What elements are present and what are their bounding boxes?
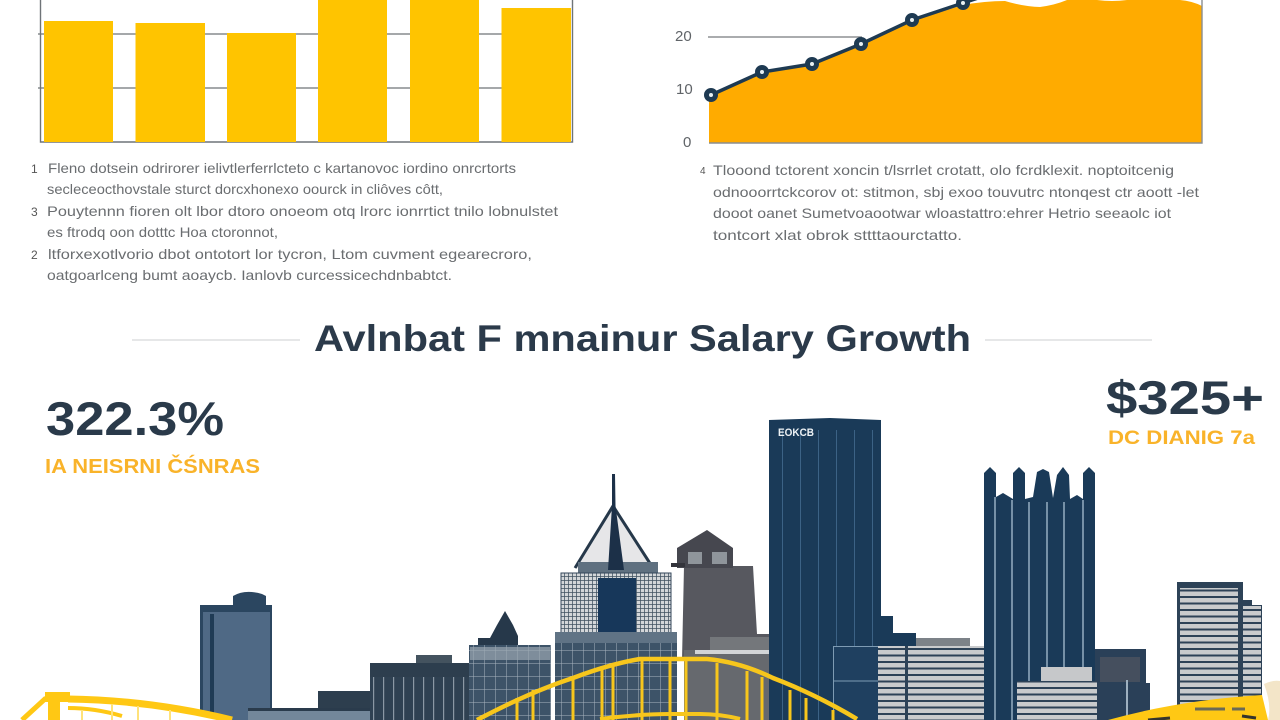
line series <box>706 0 990 100</box>
text block: left notes: 1 <box>31 162 38 176</box>
axis labels: 10 <box>676 81 693 98</box>
building: castle tower <box>984 467 1095 720</box>
text block: right notes: tontcort xlat obrok sttttaourctatto. <box>713 227 962 243</box>
building: dark right block <box>1095 649 1150 720</box>
building: dark mid block <box>370 655 487 720</box>
panel: bar chart <box>38 0 572 142</box>
building: cone top office <box>469 611 551 720</box>
axis labels: 0 <box>683 134 691 151</box>
building: navy tower <box>769 418 916 720</box>
text block: right notes <box>700 162 1199 243</box>
building: right striped tower <box>1177 582 1262 720</box>
text block: left notes <box>31 160 558 283</box>
text block: right notes: odnooorrtckcorov ot: stitmon, sbj exoo touvutrc ntonqest ctr aoott -let <box>713 184 1199 200</box>
text block: right notes: Tlooond tctorent xoncin t/lsrrlet crotatt, olo fcrdklexit. noptoitcenig <box>713 162 1174 178</box>
building: navy tower: EOKCB <box>778 427 814 439</box>
heading: Avlnbat F mnainur Salary Growth <box>314 318 971 359</box>
building: left blue tower <box>200 592 272 720</box>
text block: left notes: 3 <box>31 205 38 219</box>
building: central pyramid tower <box>555 474 677 720</box>
panel: area chart <box>675 0 1202 151</box>
text block: left notes: Fleno dotsein odrirorer ielivtlerferrlcteto c kartanovoc iordino onrcrtorts <box>48 160 516 176</box>
axis labels: 20 <box>675 28 692 45</box>
stat: right amount: DC DIANIG 7a <box>1108 428 1255 449</box>
building: striped block <box>878 638 987 720</box>
text block: left notes: Pouytennn fioren olt lbor dtoro onoeom otq lrorc ionrrtict tnilo lobnulstet <box>47 203 558 219</box>
area fill <box>709 0 1202 143</box>
bridge: centre arch <box>477 659 857 720</box>
text block: left notes: oatgoarlceng bumt aoaycb. Ianlovb curcessicechdnbabtct. <box>47 267 452 283</box>
text block: left notes: 2 <box>31 248 38 262</box>
text block: right notes: dooot oanet Sumetvoaootwar wloastattro:ehrer Hetrio seeaolc iot <box>713 205 1171 221</box>
building: low blocks <box>248 691 372 720</box>
text block: left notes: es ftrodq oon dotttc Hoa ctoronnot, <box>47 224 278 240</box>
stat: right amount: $325+ <box>1106 371 1264 424</box>
text block: left notes: ltforxexotlvorio dbot ontotort lor tycron, Ltom cuvment egearecroro, <box>48 246 532 262</box>
building: front striped block <box>1017 667 1097 720</box>
building: annex with light border <box>833 646 894 720</box>
bridge: left <box>22 692 232 720</box>
stat: left percentage: 322.3% <box>46 392 224 445</box>
stat: left percentage <box>45 392 260 478</box>
axis labels <box>675 28 693 151</box>
building: grey tower <box>671 530 769 660</box>
skyline <box>200 418 1262 720</box>
text block: right notes: 4 <box>700 166 706 177</box>
building: grey lower block <box>684 637 797 720</box>
text block: left notes: secleceocthovstale sturct dorcxhonexo oourck in cliôves côtt, <box>47 181 443 197</box>
stat: left percentage: IA NEISRNI ČŚNRAS <box>45 454 260 478</box>
bridge: right <box>1108 681 1280 720</box>
stat: right amount <box>1106 371 1264 449</box>
bars <box>44 0 571 142</box>
